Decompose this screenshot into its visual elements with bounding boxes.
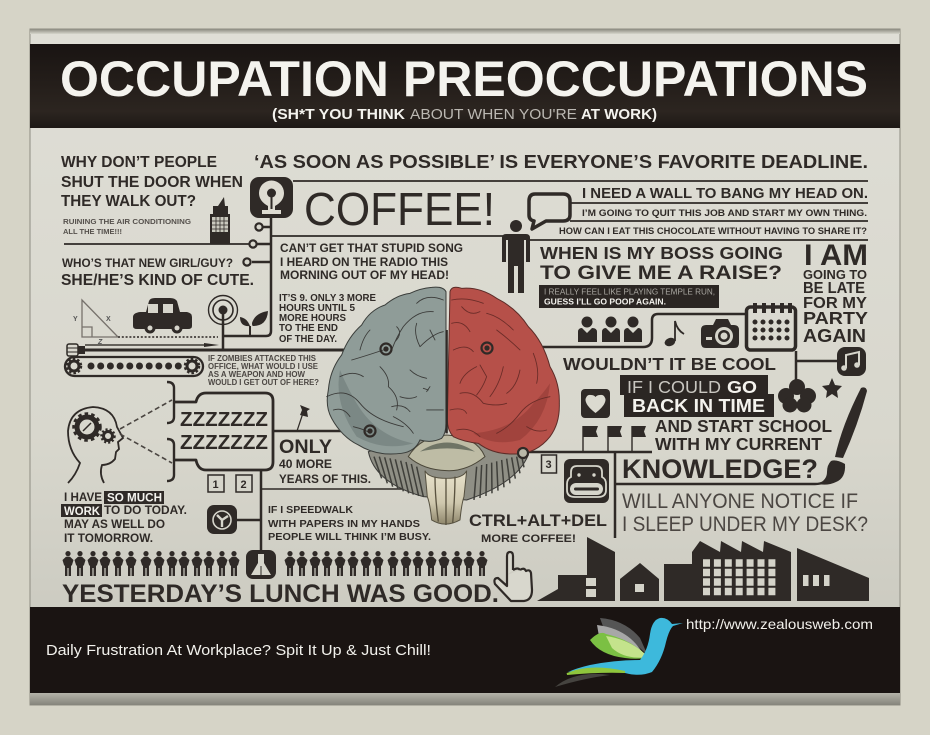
- text: zombies: [208, 354, 319, 387]
- icon: skyline factory: [664, 541, 791, 601]
- text: i am late: I AM: [804, 239, 868, 272]
- icon: brackets: [167, 382, 174, 481]
- text: so much work: WORK: [64, 504, 100, 518]
- text: speedwalk: IF I SPEEDWALK: [268, 504, 353, 516]
- left hemisphere: [327, 287, 446, 454]
- chart: brain illustration: [327, 287, 559, 525]
- callout: back in time: GO: [727, 377, 757, 397]
- icon: row of people, right: [284, 551, 488, 576]
- text: zombies: WOULD I GET OUT OF HERE?: [208, 378, 319, 387]
- pons: [408, 435, 485, 471]
- icon: monkey badge: [564, 459, 609, 503]
- icon: triangle diagram: Y: [73, 316, 78, 323]
- text: so much work: SO MUCH: [107, 490, 162, 504]
- text: wouldn't it be cool: WOULDN’T IT BE COOL: [563, 354, 776, 374]
- text: only 40 more years: 40 MORE: [279, 459, 332, 471]
- text: ctrl alt del: [469, 511, 607, 545]
- text: new girl or guy: WHO’S THAT NEW GIRL/GUY?: [62, 256, 233, 270]
- icon: skyline warehouse: [797, 548, 869, 601]
- text: stupid song: CAN’T GET THAT STUPID SONG: [280, 243, 463, 255]
- left folds: [327, 297, 443, 433]
- text: i am late: FOR MY: [803, 295, 868, 312]
- icon: heart badge: [581, 389, 610, 418]
- icon: calendar: [746, 303, 796, 350]
- icon: paintbrush: [818, 387, 867, 485]
- text: so much work: [61, 490, 187, 545]
- icon: numbered tags 1 and 2: 2: [240, 479, 247, 491]
- icon: star: [822, 378, 842, 398]
- icon: push pin: [297, 405, 310, 431]
- text: i am late: BE LATE: [803, 280, 865, 297]
- icon: standing person: [502, 220, 530, 293]
- text: speedwalk: [268, 504, 431, 543]
- icon: three flags: [583, 426, 646, 452]
- text: sleep under desk: I SLEEP UNDER MY DESK?: [622, 513, 868, 536]
- icon: flower: [778, 379, 816, 412]
- center divide: [443, 330, 450, 433]
- panel: zzz box: ZZZZZZZ: [180, 432, 268, 454]
- icon: camera: [701, 319, 739, 348]
- icon: speech bubble: [529, 194, 570, 229]
- text: new girl or guy: [61, 256, 254, 289]
- callout: back in time: BACK IN TIME: [632, 396, 765, 416]
- brain stem: [425, 471, 467, 524]
- cerebellum: [368, 437, 528, 500]
- text: hours until end of day: MORE HOURS: [279, 313, 346, 324]
- left hemisphere shading: [339, 370, 413, 446]
- text: stupid song: MORNING OUT OF MY HEAD!: [280, 270, 449, 282]
- text: stupid song: [280, 243, 463, 282]
- icon: plant: [240, 311, 268, 336]
- text: boss raise: TO GIVE ME A RAISE?: [540, 262, 782, 284]
- text: speedwalk: PEOPLE WILL THINK I’M BUSY.: [268, 531, 431, 543]
- icon: dashed sight lines: [120, 400, 172, 463]
- text: start school knowledge: [622, 416, 832, 484]
- cerebellum stripes: [374, 456, 524, 500]
- icon: numbered tag 3: [542, 455, 556, 473]
- connector node circles: [243, 223, 263, 266]
- connector lines: [64, 181, 868, 550]
- icon: hummingbird logo: [555, 618, 683, 687]
- text: only 40 more years: YEARS OF THIS.: [279, 474, 371, 486]
- text: hours until end of day: IT’S 9. ONLY 3 MORE: [279, 293, 376, 304]
- right hemisphere shading: [473, 383, 550, 442]
- text: hours until end of day: [279, 293, 376, 345]
- panel: footer: [30, 607, 900, 705]
- text: only 40 more years: [279, 437, 371, 486]
- footer url: http://www.zealousweb.com: [686, 616, 873, 632]
- text: zombies: AS A WEAPON AND HOW: [208, 370, 306, 379]
- icon: row of people, left: [62, 551, 240, 576]
- text: door question: SHUT THE DOOR WHEN: [61, 174, 243, 191]
- icon: fan badge: [207, 505, 237, 534]
- subtitle: ABOUT WHEN YOU'RE: [410, 106, 577, 123]
- text: so much work: MAY AS WELL DO: [64, 517, 165, 531]
- subtitle: AT WORK): [581, 106, 657, 123]
- text: stupid song: I HEARD ON THE RADIO THIS: [280, 257, 448, 269]
- text: i am late: PARTY: [803, 308, 868, 328]
- icon: three business people: [578, 316, 642, 342]
- icon: music badge: [837, 347, 866, 376]
- right folds: [450, 299, 550, 437]
- text: sleep under desk: WILL ANYONE NOTICE IF: [622, 490, 858, 513]
- text: sleep under desk: [622, 490, 868, 536]
- text: speedwalk: WITH PAPERS IN MY HANDS: [268, 518, 420, 530]
- text: wall and quit lines: I NEED A WALL TO BANG MY HEAD ON.: [582, 186, 868, 202]
- icon: skyline building one: [537, 537, 615, 601]
- text: door question: RUINING THE AIR CONDITIONING: [63, 217, 191, 226]
- text: so much work: IT TOMORROW.: [64, 531, 153, 545]
- text: hours until end of day: HOURS UNTIL 5: [279, 303, 355, 314]
- text: so much work: I HAVE: [64, 490, 102, 504]
- text: coffee: COFFEE!: [304, 183, 495, 235]
- text: wall and quit lines: HOW CAN I EAT THIS CHOCOLATE WITHOUT HAVING TO SHARE IT?: [559, 226, 867, 237]
- icon: numbered tag 3: 3: [546, 459, 552, 471]
- text: door question: [61, 154, 243, 236]
- text: wall and quit lines: [559, 186, 868, 237]
- icon: skyline house: [620, 563, 659, 601]
- icon: keyhole lamp badge: [250, 177, 293, 218]
- icon: triangle diagram: X: [106, 316, 111, 323]
- text: start school knowledge: WITH MY CURRENT: [655, 434, 822, 454]
- text: i am late: GOING TO: [803, 268, 867, 282]
- text: start school knowledge: KNOWLEDGE?: [622, 454, 818, 484]
- title: OCCUPATION PREOCCUPATIONS: [60, 51, 868, 107]
- subtitle: [272, 106, 657, 123]
- text: i am late: AGAIN: [803, 326, 866, 346]
- icon: music note: [663, 321, 684, 348]
- brain stem ridges: [435, 477, 455, 525]
- icon: numbered tags 1 and 2: 1: [212, 479, 219, 491]
- heading: yesterday's lunch: YESTERDAY’S LUNCH WAS GOOD.: [62, 580, 499, 608]
- text: hours until end of day: TO THE END: [279, 323, 338, 334]
- icon: pointing hand: [494, 552, 532, 601]
- brain connector nodes: [364, 342, 528, 458]
- panel: header: [30, 44, 900, 128]
- text: wall and quit lines: I’M GOING TO QUIT THIS JOB AND START MY OWN THING.: [582, 208, 867, 219]
- panel: zzz box: [174, 393, 273, 470]
- text: new girl or guy: SHE/HE’S KIND OF CUTE.: [61, 272, 254, 289]
- text: zombies: IF ZOMBIES ATTACKED THIS: [208, 354, 316, 363]
- icon: head with gears: [68, 407, 123, 483]
- callout: back in time: [620, 375, 774, 417]
- text: door question: THEY WALK OUT?: [61, 193, 196, 210]
- callout: temple run: I REALLY FEEL LIKE PLAYING TEMPLE RUN,: [544, 288, 715, 296]
- text: door question: WHY DON’T PEOPLE: [61, 154, 217, 171]
- icon: numbered tags 1 and 2: [208, 475, 252, 492]
- text: ctrl alt del: CTRL+ALT+DEL: [469, 511, 607, 530]
- subtitle: (SH*T YOU THINK: [272, 106, 405, 123]
- footer tagline: Daily Frustration At Workplace? Spit It Up & Just Chill!: [46, 642, 431, 659]
- text: door question: ALL THE TIME!!!: [63, 227, 122, 236]
- icon: flask badge: [246, 550, 276, 579]
- callout: temple run: GUESS I’LL GO POOP AGAIN.: [544, 298, 666, 306]
- heading: deadline: ‘AS SOON AS POSSIBLE’ IS EVERYONE’S FAVORITE DEADLINE.: [254, 152, 868, 172]
- top edge shadow: [30, 29, 900, 34]
- text: hours until end of day: OF THE DAY.: [279, 334, 337, 345]
- right hemisphere: [447, 287, 559, 454]
- icon: car: [133, 298, 192, 334]
- text: start school knowledge: AND START SCHOOL: [655, 416, 832, 436]
- text: i am late: [803, 239, 868, 346]
- text: so much work: TO DO TODAY.: [104, 503, 187, 517]
- text: only 40 more years: ONLY: [279, 437, 332, 458]
- text: ctrl alt del: MORE COFFEE!: [481, 533, 576, 545]
- icon: triangle diagram: Z: [97, 339, 103, 346]
- callout: back in time: IF I COULD: [627, 377, 721, 397]
- panel: zzz box: ZZZZZZZ: [180, 409, 268, 431]
- icon: pencil end: [67, 344, 85, 356]
- text: zombies: OFFICE, WHAT WOULD I USE: [208, 362, 318, 371]
- icon: conveyor belt: [65, 357, 203, 376]
- icon: office building: [210, 197, 230, 244]
- callout: temple run: [539, 285, 719, 308]
- text: boss raise: [540, 243, 783, 284]
- text: boss raise: WHEN IS MY BOSS GOING: [540, 243, 783, 263]
- icon: triangle diagram: [73, 300, 218, 346]
- icon: radar target: [208, 296, 238, 324]
